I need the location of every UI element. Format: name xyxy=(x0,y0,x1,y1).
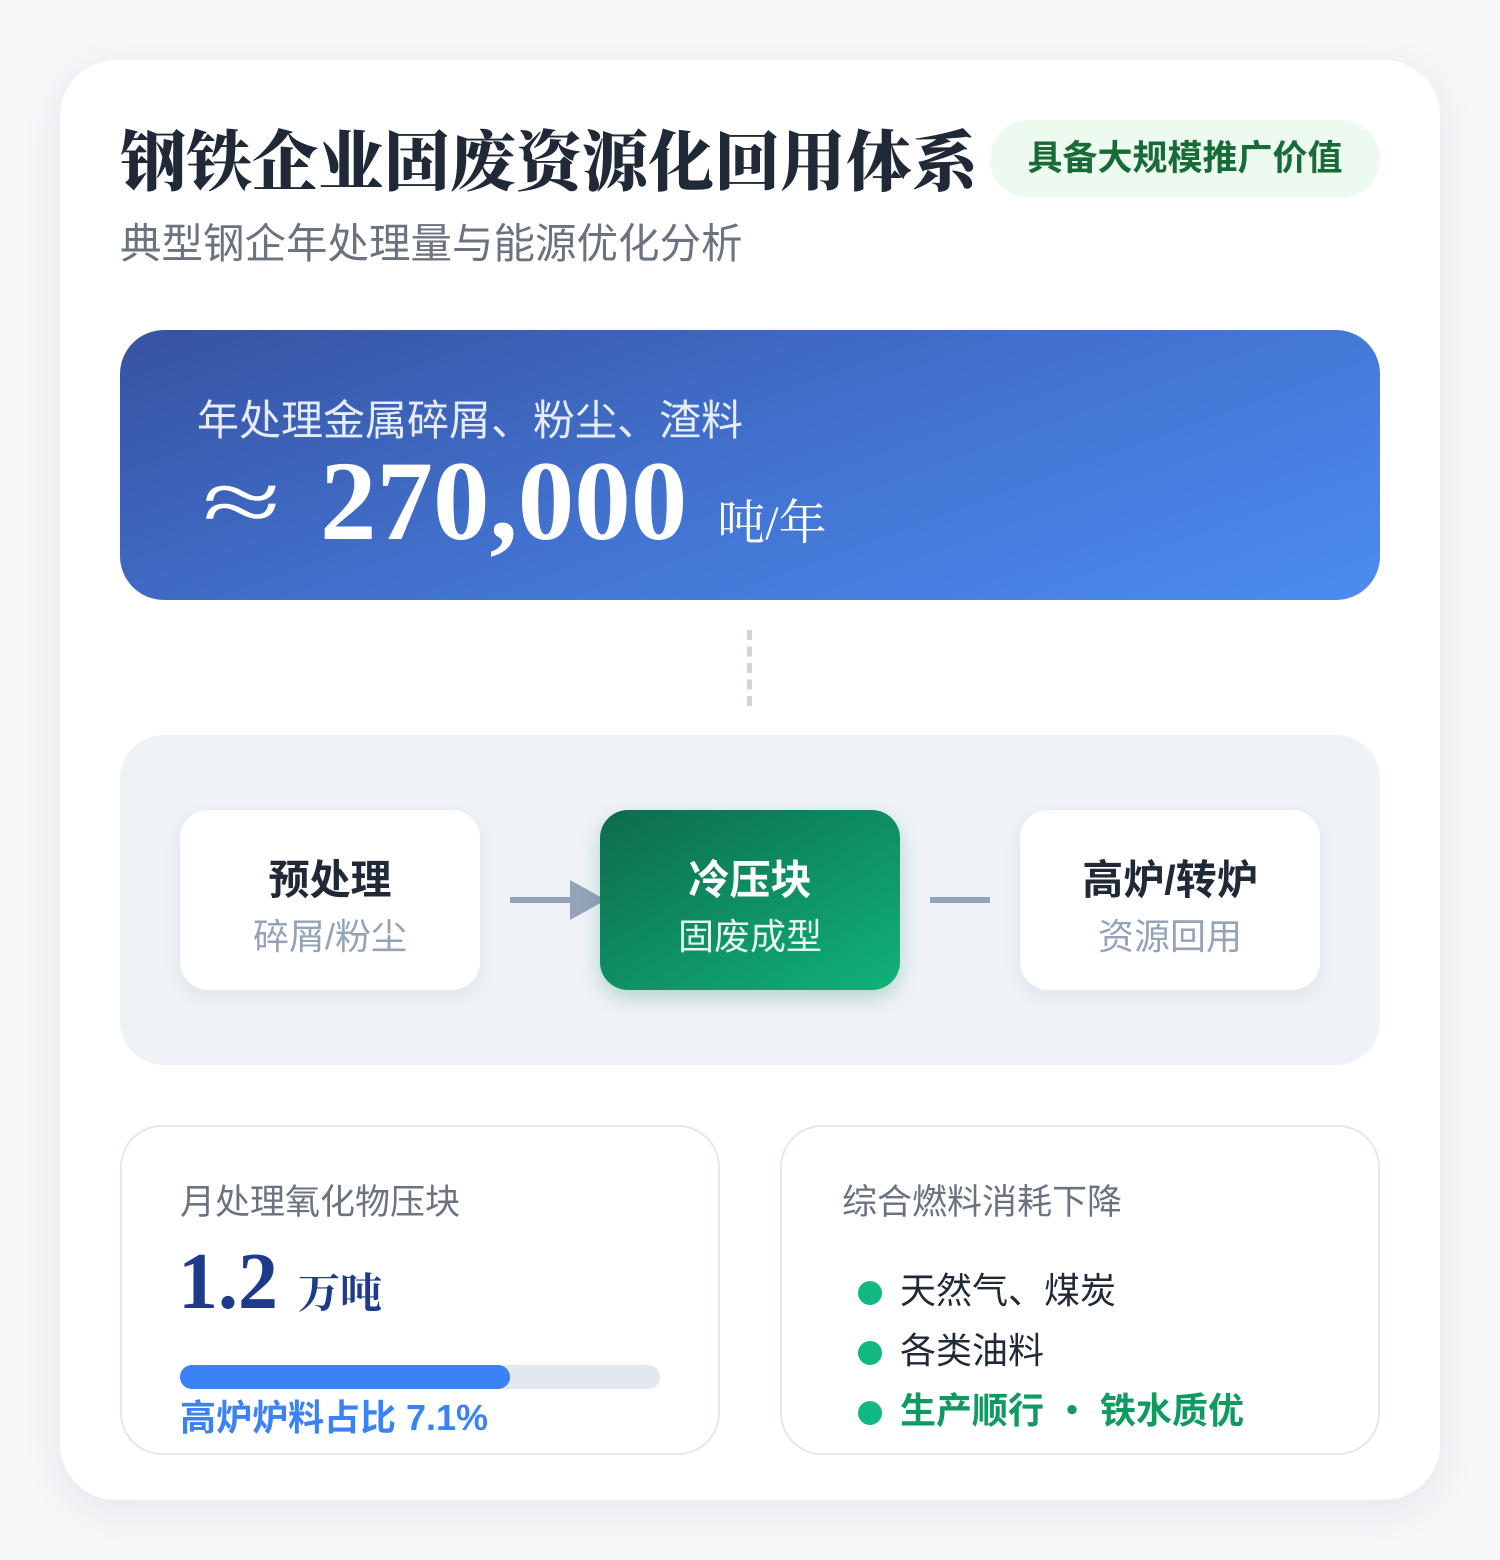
step: pretreatment: 预处理 xyxy=(268,857,392,903)
step: cold press xyxy=(600,810,900,990)
subtitle: 典型钢企年处理量与能源优化分析 xyxy=(120,220,743,267)
bullet list: 生产顺行 ・ 铁水质优 xyxy=(900,1390,1244,1431)
arrow xyxy=(510,880,600,920)
step: furnace: 高炉/转炉 xyxy=(1082,857,1258,903)
progress label: 高炉炉料占比 7.1% xyxy=(180,1397,488,1438)
panel: process flow xyxy=(120,735,1380,1065)
approx sign: ≈ xyxy=(202,453,281,552)
step: pretreatment xyxy=(180,810,480,990)
card label: 综合燃料消耗下降 xyxy=(842,1183,1122,1222)
stat label: 月处理氧化物压块 xyxy=(180,1183,460,1222)
stat value: 1.2 万吨 xyxy=(178,1238,382,1326)
progress bar xyxy=(180,1365,660,1389)
banner label: 年处理金属碎屑、粉尘、渣料 xyxy=(197,397,743,444)
step: furnace: 资源回用 xyxy=(1098,916,1242,957)
step: cold press: 固废成型 xyxy=(678,916,822,957)
badge xyxy=(990,120,1380,198)
stat card: fuel reduction xyxy=(780,1125,1380,1455)
bullet list xyxy=(858,1270,1244,1431)
banner: annual volume xyxy=(120,330,1380,600)
step: furnace xyxy=(1020,810,1320,990)
step: cold press: 冷压块 xyxy=(688,857,812,903)
bullet list: 各类油料 xyxy=(900,1330,1044,1371)
connector line xyxy=(930,897,990,903)
stat card: monthly briquette xyxy=(120,1125,720,1455)
big number: 270,000 吨/年 xyxy=(320,439,827,564)
dashed connector xyxy=(747,630,752,706)
bullet list: 天然气、煤炭 xyxy=(900,1270,1116,1311)
title: 钢铁企业固废资源化回用体系 xyxy=(120,127,978,200)
badge: 具备大规模推广价值 xyxy=(1027,139,1342,178)
step: pretreatment: 碎屑/粉尘 xyxy=(253,916,407,957)
